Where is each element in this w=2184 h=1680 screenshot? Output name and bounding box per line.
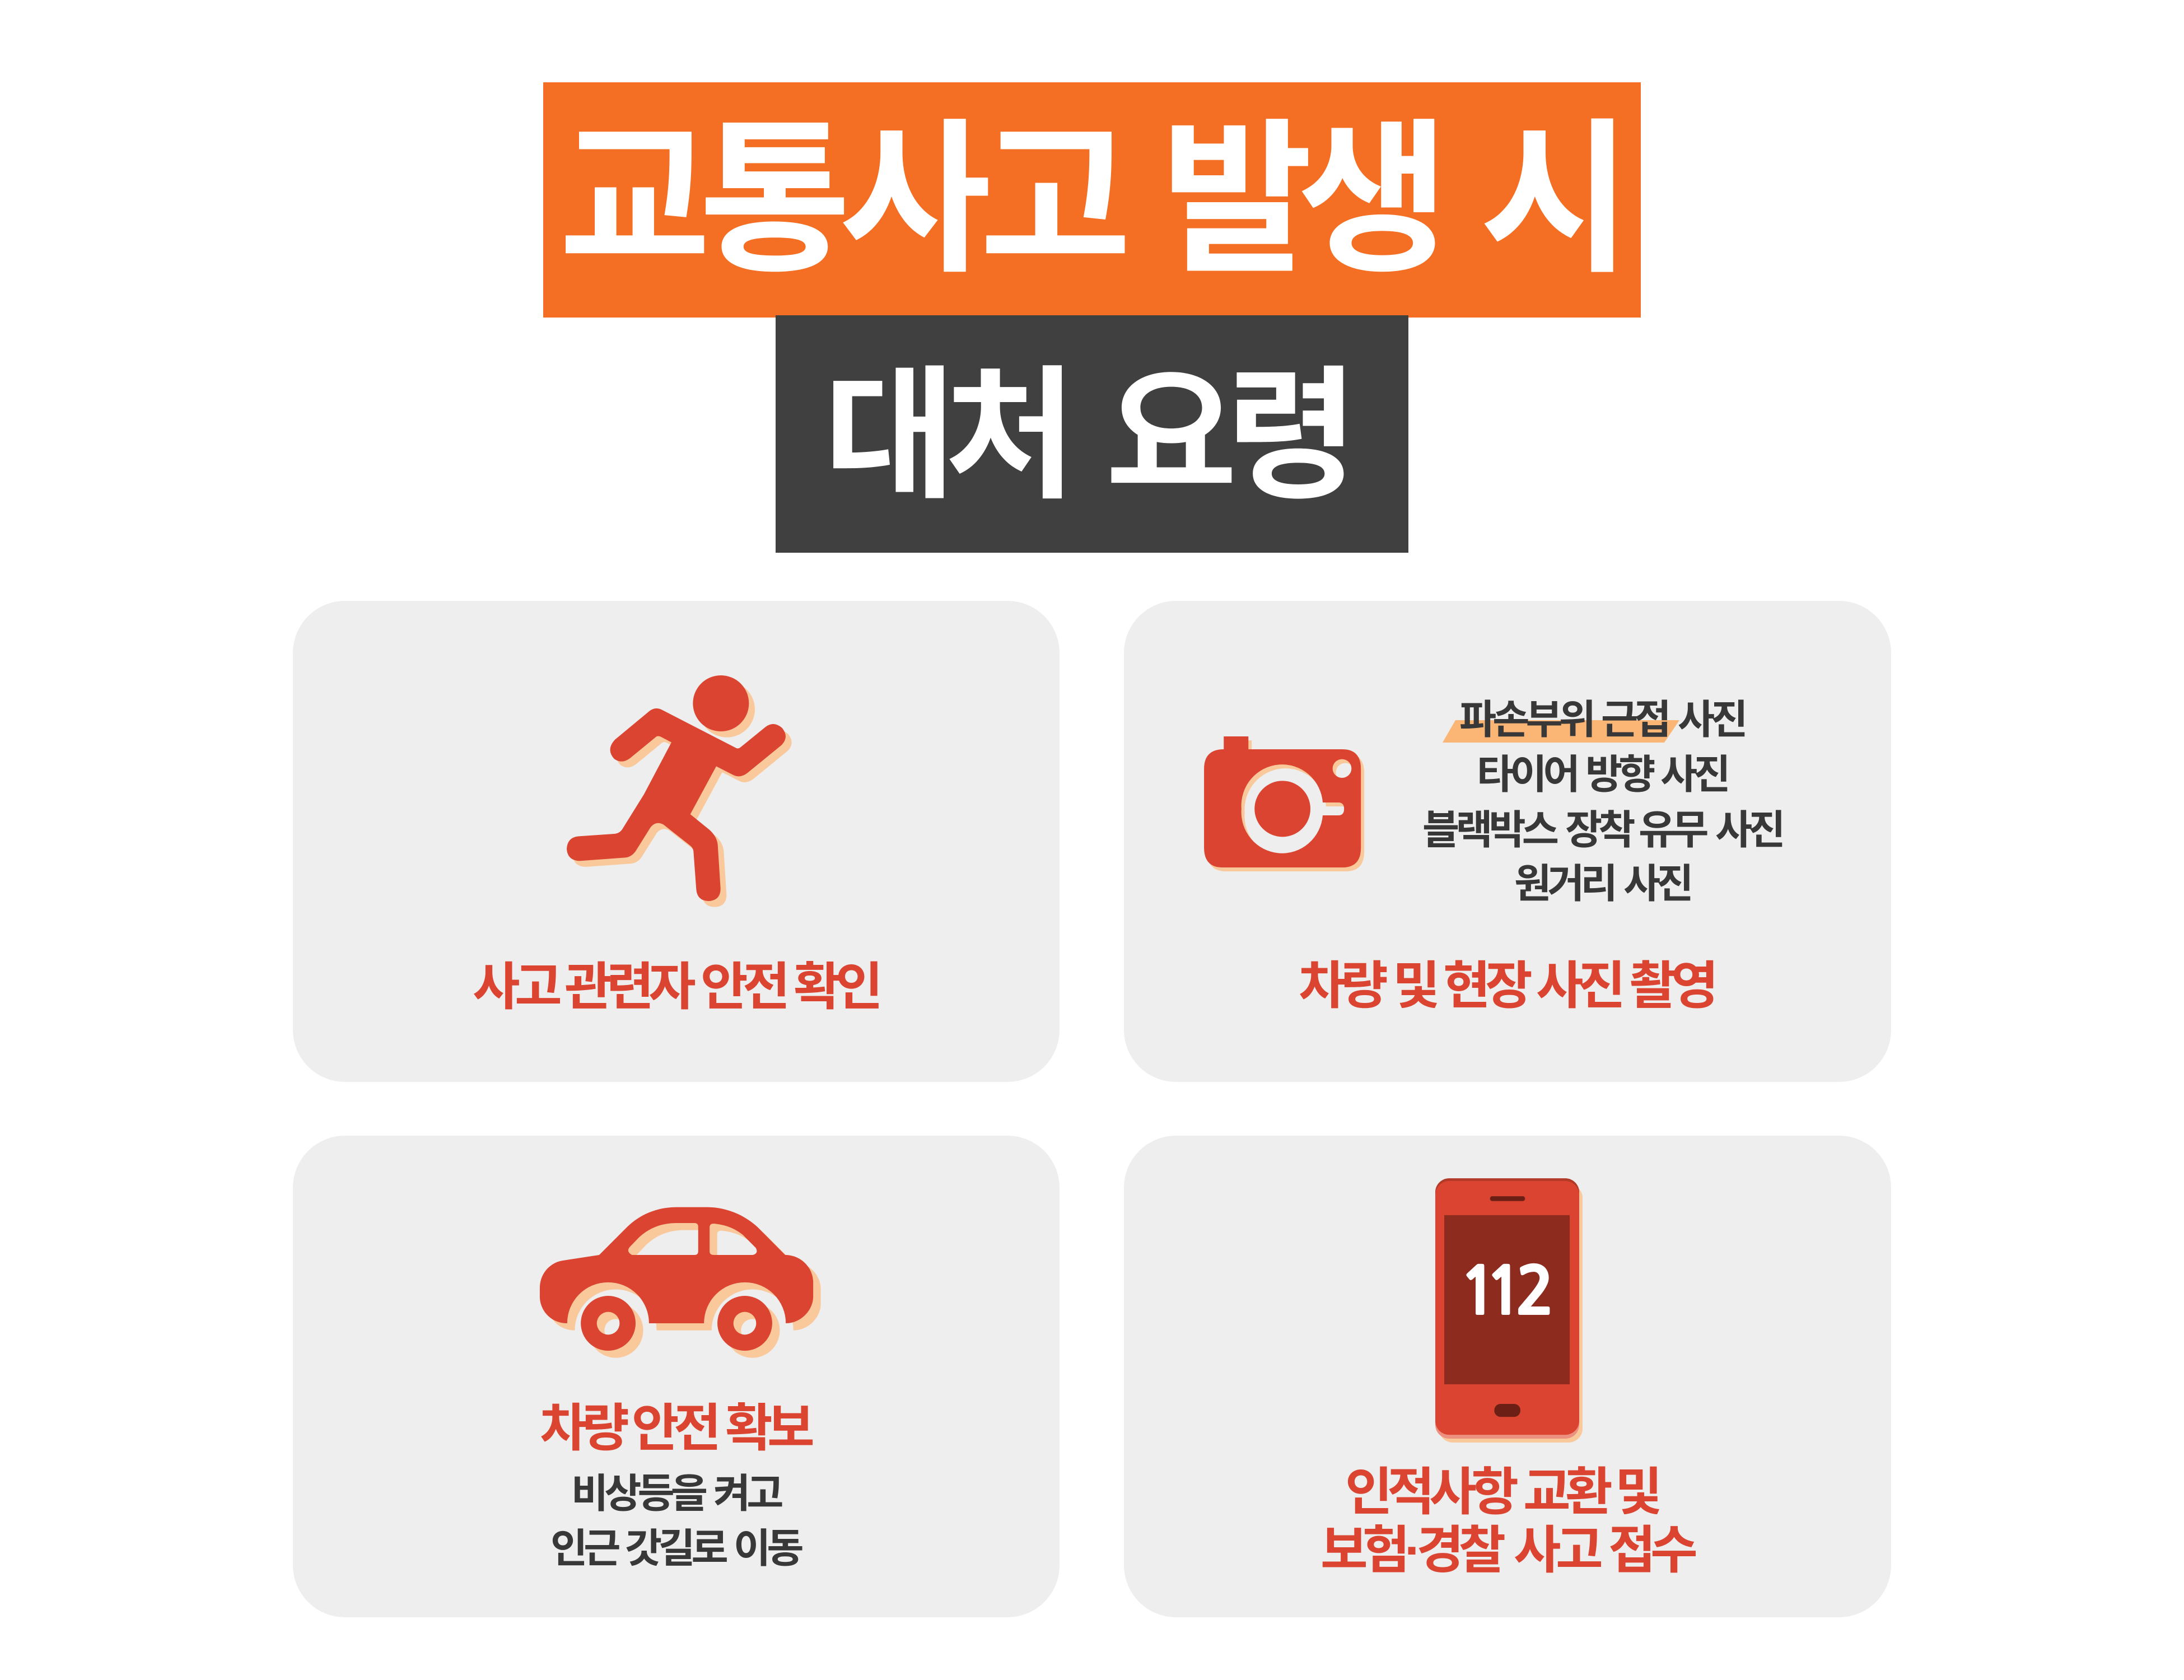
heading: exchange info: 및 [1615, 1464, 1660, 1521]
text: photo list: 타이어 [1477, 753, 1576, 797]
text: photo list: 사진 [1715, 808, 1782, 853]
text: photo list: 블랙박스 [1422, 808, 1558, 853]
text: photo list: 방향 [1585, 753, 1654, 797]
title: dark banner: 요령 [1105, 356, 1347, 516]
panel: take photos [1124, 601, 1891, 1082]
heading: exchange info: 보험·경찰 [1320, 1522, 1505, 1579]
heading: exchange info [1320, 1464, 1696, 1579]
heading: exchange info: 인적사항 [1345, 1464, 1518, 1521]
text: hazard lights: 켜고 [713, 1472, 782, 1516]
title: orange banner: 시 [1480, 108, 1620, 292]
text: hazard lights: 이동 [734, 1527, 802, 1571]
title: orange banner: 발생 [1161, 108, 1436, 292]
text: photo list: 근접 [1601, 698, 1667, 743]
title: dark banner [776, 315, 1408, 553]
icon: phone [1435, 1178, 1583, 1443]
heading: secure vehicle: 차량 [540, 1400, 628, 1457]
text: photo list: 원거리 [1514, 862, 1614, 907]
heading: take photos: 차량 [1299, 958, 1387, 1015]
heading: check safety: 관련자 [564, 959, 695, 1016]
text: hazard lights: 비상등을 [571, 1472, 707, 1516]
text: photo list: 사진 [1678, 698, 1745, 743]
title: dark banner: 대처 [824, 356, 1065, 516]
heading: secure vehicle: 안전 [632, 1400, 717, 1457]
heading: exchange info: 접수 [1608, 1522, 1696, 1579]
icon: camera [1204, 736, 1364, 871]
panel: check people involved [293, 601, 1060, 1082]
heading: check safety: 안전 [701, 959, 786, 1016]
text: photo list: 사진 [1660, 753, 1728, 797]
text: 112: 112 [1459, 1259, 1555, 1324]
heading: check safety: 확인 [794, 959, 879, 1016]
heading: take photos: 현장 [1443, 958, 1532, 1015]
panel: secure vehicle [293, 1136, 1060, 1617]
text: hazard lights: 갓길로 [625, 1527, 727, 1571]
heading: check safety: 사고 [473, 959, 560, 1016]
text: hazard lights [550, 1472, 802, 1571]
highlight swatch [1443, 720, 1679, 743]
icon: car [540, 1207, 821, 1358]
panel: exchange info and report [1124, 1136, 1891, 1617]
heading: take photos: 촬영 [1629, 958, 1714, 1015]
text: photo list [1422, 698, 1782, 907]
heading: take photos: 및 [1393, 958, 1438, 1015]
title: orange banner: 교통사고 [559, 108, 1127, 292]
heading: secure vehicle: 확보 [725, 1400, 813, 1457]
text: photo list: 사진 [1623, 862, 1691, 907]
icon: running person [567, 675, 792, 907]
text: photo list: 유무 [1639, 808, 1707, 853]
text: photo list: 파손부위 [1459, 698, 1592, 743]
text: hazard lights: 인근 [550, 1527, 619, 1571]
text: photo list: 장착 [1565, 808, 1635, 853]
heading: exchange info: 교환 [1523, 1464, 1612, 1521]
heading: exchange info: 사고 [1514, 1522, 1601, 1579]
title: orange banner [543, 82, 1641, 318]
heading: take photos: 사진 [1536, 958, 1621, 1015]
